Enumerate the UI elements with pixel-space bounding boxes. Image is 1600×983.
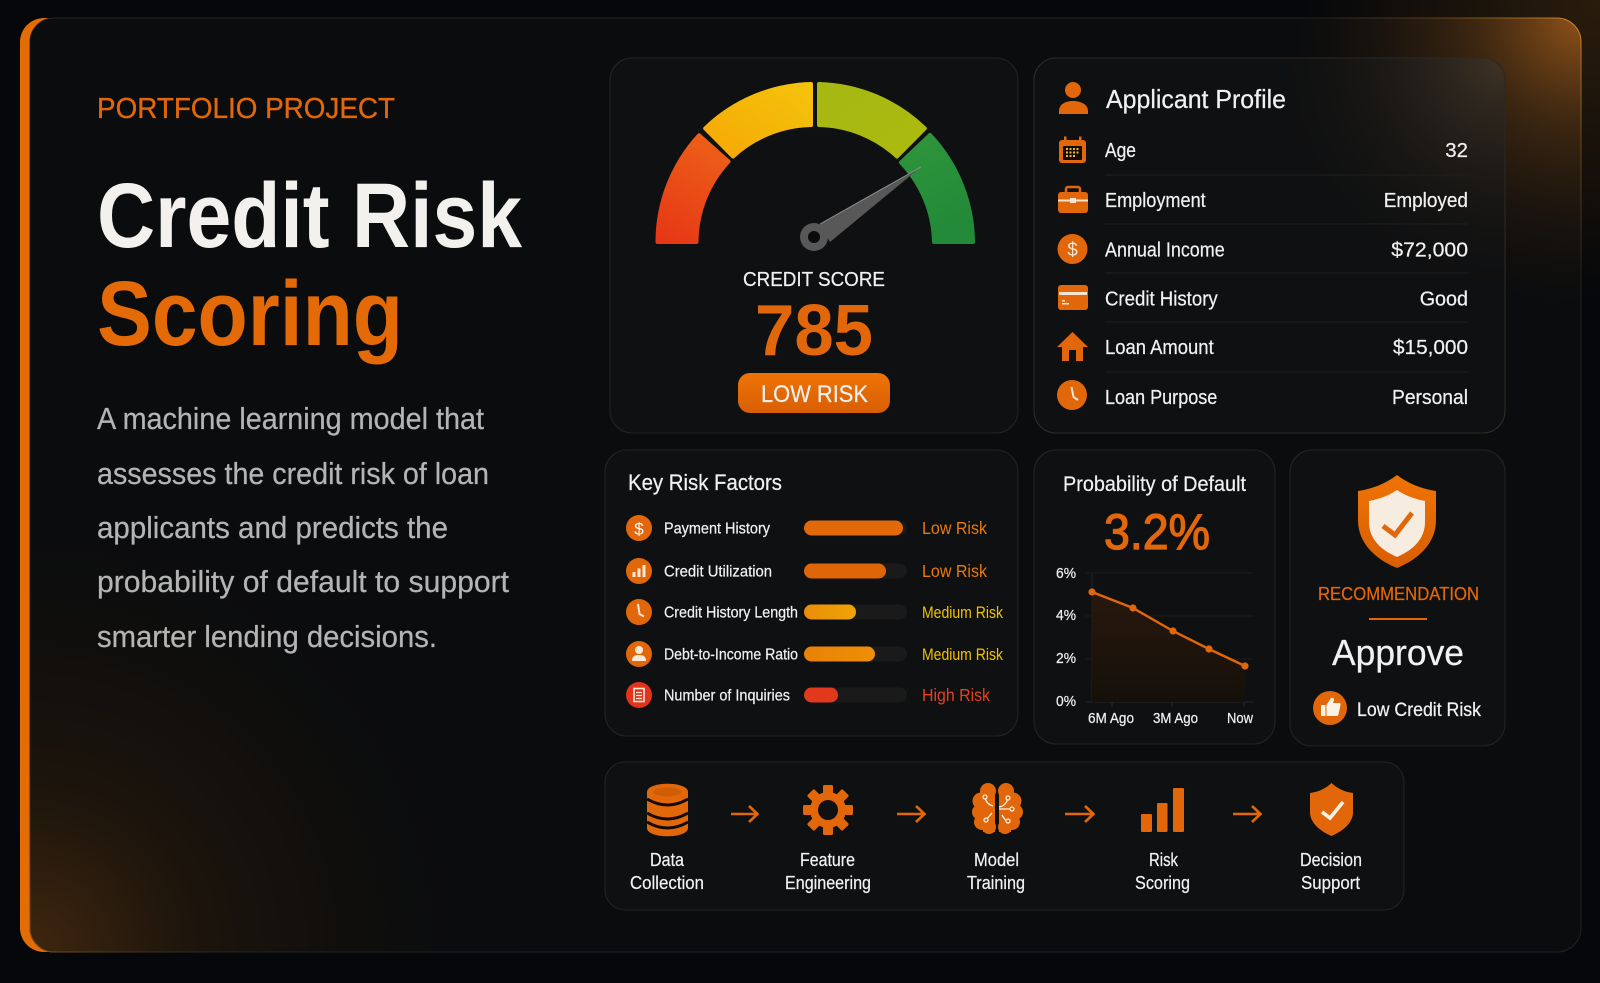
row: credit history: Credit History	[1105, 288, 1218, 310]
factor: payment history: $	[634, 520, 644, 538]
step: feature engineering: Engineering	[785, 873, 871, 893]
panel: recommendation	[1290, 450, 1505, 746]
decision: Approve	[1332, 632, 1464, 673]
factor: credit utilization: Credit Utilization	[664, 564, 772, 580]
row: loan amount: Loan Amount	[1105, 336, 1214, 359]
description	[97, 401, 509, 654]
row: loan purpose: Personal	[1392, 386, 1468, 409]
factor: debt to income ratio: Debt-to-Income Ratio	[664, 646, 798, 664]
icon: shield	[1358, 475, 1436, 568]
icon: gear	[803, 785, 853, 835]
eyebrow label: PORTFOLIO PROJECT	[97, 93, 395, 125]
icon: thumbs up	[1313, 691, 1347, 725]
line chart: 6M Ago	[1088, 711, 1134, 727]
step: risk scoring: Scoring	[1135, 873, 1190, 893]
factor: debt to income ratio	[626, 641, 1004, 667]
step: model training: Model	[974, 850, 1019, 870]
description: smarter lending decisions.	[97, 619, 437, 654]
row: employment	[1058, 187, 1468, 213]
step: data collection: Data	[650, 850, 685, 870]
icon: calendar	[1059, 136, 1086, 163]
description: probability of default to support	[97, 564, 509, 599]
description: A machine learning model that	[97, 401, 484, 436]
row: credit history: Good	[1420, 288, 1468, 310]
panel: applicant profile	[1034, 58, 1505, 433]
row: employment: Employment	[1105, 189, 1206, 212]
icon: check shield	[1310, 783, 1353, 836]
label: CREDIT SCORE	[743, 268, 885, 291]
factor: credit utilization: Low Risk	[922, 561, 987, 581]
line chart: Now	[1227, 711, 1253, 727]
step: risk scoring: Risk	[1149, 850, 1179, 870]
line chart	[1056, 566, 1253, 727]
orange accent bar	[20, 18, 80, 952]
score value: 785	[755, 291, 873, 371]
profile heading: Applicant Profile	[1106, 84, 1286, 114]
row: annual income	[1058, 234, 1468, 264]
factor: debt to income ratio: Medium Risk	[922, 646, 1004, 664]
arrow	[897, 806, 924, 822]
step: feature engineering	[785, 785, 871, 893]
row: age	[1059, 136, 1468, 163]
left column: intro	[97, 93, 523, 654]
icon: database	[647, 784, 688, 836]
factor: number of inquiries	[626, 682, 990, 708]
panel: probability of default	[1034, 450, 1275, 744]
icon: dollar coin	[1058, 234, 1088, 264]
title line 1: Credit Risk	[97, 165, 523, 267]
row: annual income: Annual Income	[1105, 238, 1225, 262]
row: age: 32	[1445, 139, 1468, 162]
gauge needle	[800, 167, 921, 251]
factor: credit history length: Credit History Length	[664, 604, 798, 622]
label: RECOMMENDATION	[1318, 584, 1479, 604]
description: assesses the credit risk of loan	[97, 456, 489, 491]
step: model training	[967, 783, 1025, 893]
icon: briefcase	[1058, 187, 1088, 213]
factor: number of inquiries: High Risk	[922, 685, 990, 705]
line chart: 4%	[1056, 608, 1076, 624]
step: decision support: Support	[1301, 873, 1360, 893]
risk badge: LOW RISK	[761, 381, 868, 408]
icon: brain	[972, 783, 1023, 834]
icon: clock	[1057, 380, 1087, 410]
title line 2: Scoring	[97, 263, 403, 365]
gauge arc	[658, 84, 973, 242]
step: feature engineering: Feature	[800, 850, 855, 870]
factor: credit history length	[626, 599, 1004, 625]
factor: payment history: Payment History	[664, 520, 770, 538]
panel: credit score gauge	[610, 58, 1018, 433]
line chart: 6%	[1056, 566, 1076, 582]
row: loan amount: $15,000	[1393, 336, 1468, 359]
arrow	[1065, 806, 1094, 822]
factor: payment history: Low Risk	[922, 518, 987, 538]
row: age: Age	[1105, 139, 1136, 162]
panel: pipeline	[605, 762, 1404, 910]
row: loan purpose: Loan Purpose	[1105, 386, 1217, 409]
line chart: 3M Ago	[1153, 711, 1198, 727]
icon: dollar coin: $	[1067, 240, 1078, 261]
arrow	[1233, 806, 1260, 822]
step: model training: Training	[967, 873, 1025, 893]
icon: person	[1059, 82, 1088, 114]
icon: house	[1057, 332, 1088, 361]
icon: credit card	[1058, 285, 1088, 310]
heading: Key Risk Factors	[628, 470, 782, 495]
step: data collection	[630, 784, 704, 893]
step: data collection: Collection	[630, 873, 704, 893]
line chart: 0%	[1056, 694, 1076, 710]
factor: credit history length: Medium Risk	[922, 604, 1004, 622]
factor: payment history	[626, 515, 987, 541]
row: loan purpose	[1057, 380, 1468, 410]
panel: key risk factors	[605, 450, 1018, 736]
row: credit history	[1058, 285, 1468, 310]
row: loan amount	[1057, 332, 1468, 361]
factor: credit utilization	[626, 558, 987, 584]
factor: number of inquiries: Number of Inquiries	[664, 688, 790, 704]
row: employment: Employed	[1384, 189, 1468, 212]
step: risk scoring	[1135, 788, 1190, 893]
caption: Low Credit Risk	[1357, 700, 1481, 721]
row: annual income: $72,000	[1391, 238, 1468, 262]
description: applicants and predicts the	[97, 510, 448, 545]
line chart: 2%	[1056, 651, 1076, 667]
value: 3.2%	[1104, 504, 1210, 560]
heading: Probability of Default	[1063, 473, 1246, 496]
risk badge	[738, 373, 890, 413]
arrow	[731, 806, 758, 822]
step: decision support	[1300, 783, 1362, 893]
icon: bars	[1141, 788, 1184, 832]
step: decision support: Decision	[1300, 850, 1362, 870]
